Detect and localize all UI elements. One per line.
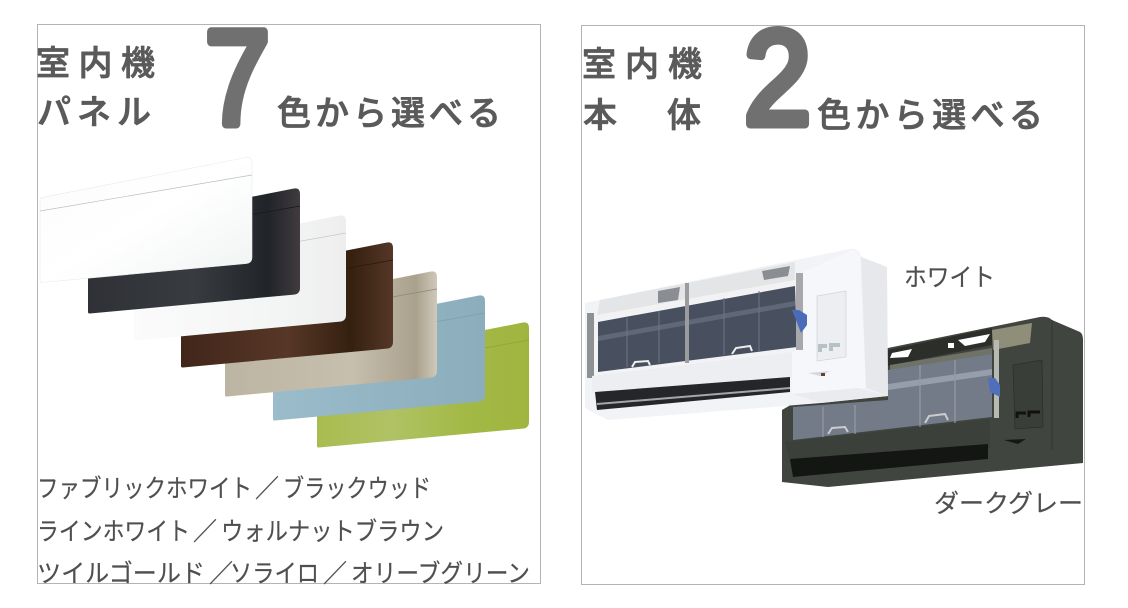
heading: indoor unit body: 本 <box>583 97 617 135</box>
colour names list: ／ <box>323 560 347 588</box>
side cover <box>1013 360 1043 429</box>
louvre <box>595 377 790 410</box>
heading: indoor unit body: 体 <box>667 97 701 135</box>
colour names list: ラインホワイト <box>37 518 190 546</box>
heading: indoor unit panel <box>36 45 155 132</box>
swatch: black wood <box>88 188 300 314</box>
colour names list: ブラックウッド <box>283 475 431 503</box>
colour names list: ／ <box>193 518 217 546</box>
blue clip <box>988 378 1000 397</box>
heading: choose from colours: 色から選べる <box>817 97 1043 135</box>
heading: indoor unit panel: パネル <box>37 94 151 132</box>
colour names list: ソライロ <box>230 560 319 588</box>
colour names list <box>37 475 530 588</box>
swatch: sora iro blue <box>273 295 485 421</box>
swatch: olive green <box>317 322 529 448</box>
filter <box>598 286 797 372</box>
panel: indoor panel colours <box>36 2 540 588</box>
colour names list: ／ <box>255 475 279 503</box>
swatch: line white <box>134 215 346 341</box>
panel: indoor unit body colours <box>582 4 1084 584</box>
swatch: twill gold <box>225 271 437 397</box>
blue clip <box>792 310 807 333</box>
side cover <box>792 250 866 394</box>
unit: white <box>585 249 888 420</box>
swatch: walnut brown <box>181 242 393 368</box>
unit: dark grey <box>782 317 1083 487</box>
filter <box>793 354 992 440</box>
colour names list: オリーブグリーン <box>351 560 530 588</box>
colour names list: ファブリックホワイト <box>37 475 252 503</box>
label: white: ホワイト <box>904 264 995 292</box>
heading: indoor unit body <box>582 46 702 135</box>
big number 2: 2 <box>744 4 811 153</box>
louvre <box>790 444 988 477</box>
heading: indoor unit panel: 室内機 <box>36 45 155 83</box>
label: dark grey: ダークグレー <box>934 490 1083 518</box>
swatch: fabric white <box>40 157 252 283</box>
heading: indoor unit body: 室内機 <box>582 46 702 84</box>
colour names list: ツイルゴールド <box>37 560 205 588</box>
heading: choose from colours: 色から選べる <box>277 95 501 133</box>
big number 7: 7 <box>205 2 270 153</box>
panel stack: seven colour panels <box>40 157 529 448</box>
colour names list: ウォルナットブラウン <box>221 518 444 546</box>
colour names list: ／ <box>209 560 233 588</box>
